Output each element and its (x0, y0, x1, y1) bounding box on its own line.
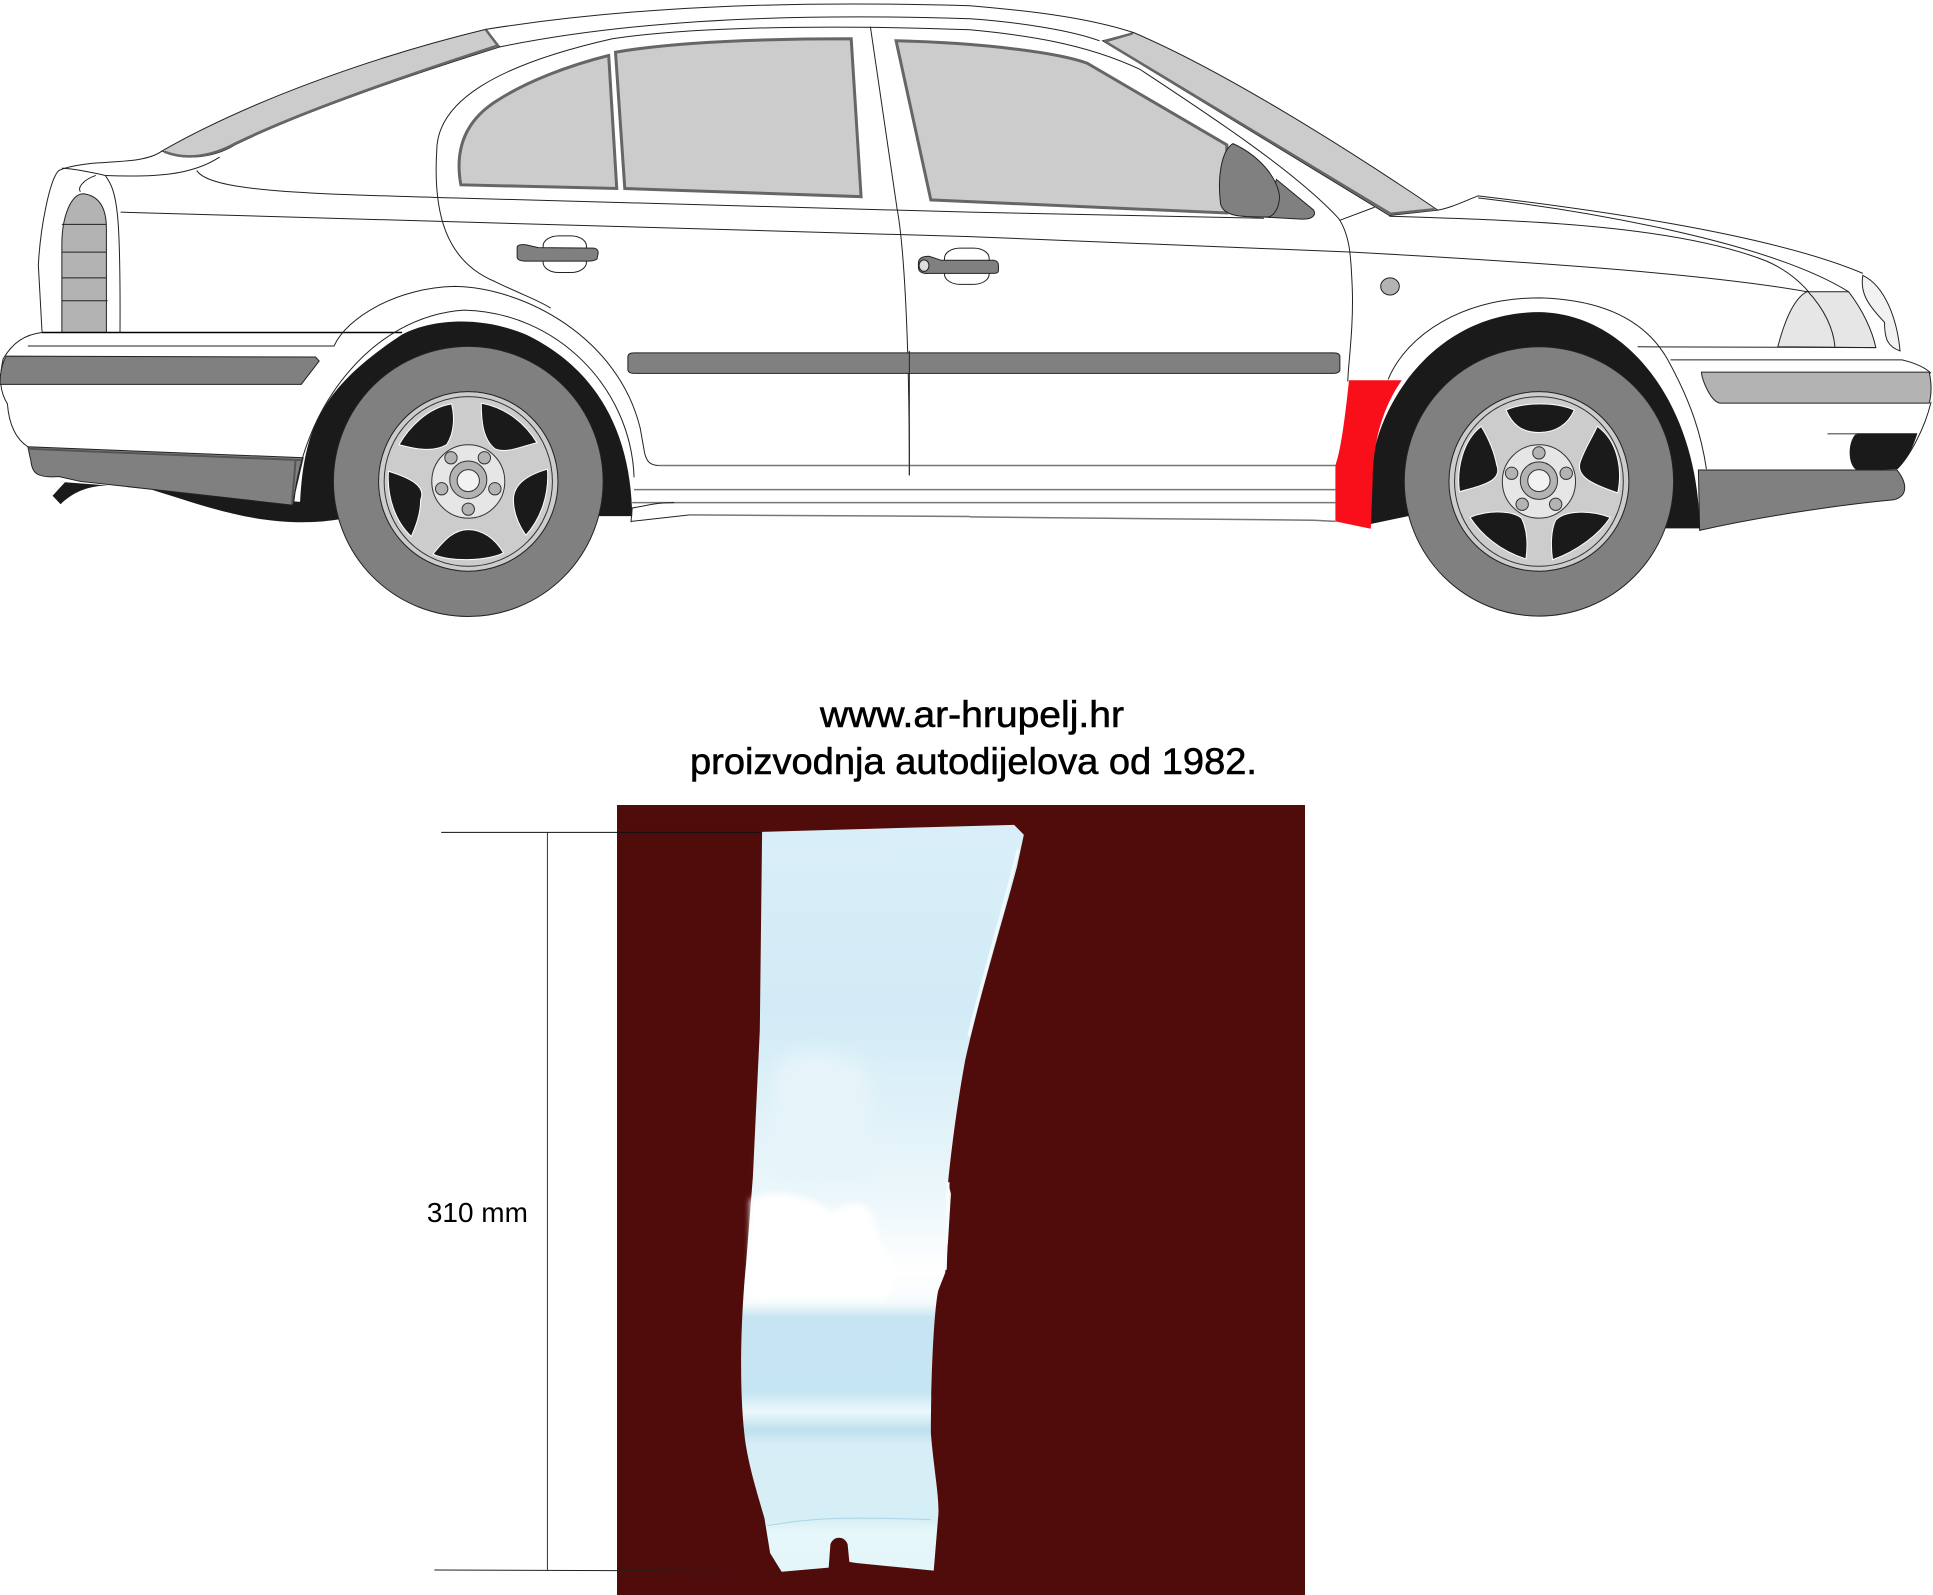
side mirror (1219, 144, 1280, 217)
side indicator (1381, 278, 1399, 295)
roof, door and hood lines (970, 6, 1863, 381)
tail light (62, 194, 108, 333)
rear door window (616, 39, 861, 197)
product photo: repair panel (741, 825, 1024, 1572)
rear half of car (0, 4, 1340, 616)
mirror base (1264, 180, 1314, 219)
heading: website and tagline (690, 694, 1257, 782)
highlighted repair panel (1335, 380, 1402, 529)
front bumper (1638, 347, 1931, 530)
rear door handle (517, 236, 598, 273)
front wheel (1404, 347, 1674, 616)
tagline: proizvodnja autodijelova od 1982. (690, 741, 1257, 782)
rear wheel (333, 346, 603, 616)
rear underbody shadow (53, 449, 346, 522)
dimension label: 310 mm (427, 1197, 528, 1228)
front half of car (896, 6, 1931, 616)
rear quarter window (459, 55, 617, 188)
rear lower valance (28, 447, 303, 505)
panel: product photo on maroon background (617, 805, 1305, 1595)
side moulding (628, 353, 1340, 373)
front door window (896, 41, 1227, 213)
windshield (1103, 33, 1438, 215)
front wheel arch (1370, 298, 1706, 528)
rear windshield (162, 29, 500, 157)
headlight (1778, 275, 1900, 351)
sill lines, rear part (631, 351, 970, 522)
website address: www.ar-hrupelj.hr (819, 694, 1124, 735)
roof and body outline lines (38, 4, 970, 475)
rear wheel arch (300, 322, 632, 518)
rear bumper (0, 286, 645, 453)
sill lines, front part (970, 466, 1335, 521)
front door handle (918, 248, 998, 284)
